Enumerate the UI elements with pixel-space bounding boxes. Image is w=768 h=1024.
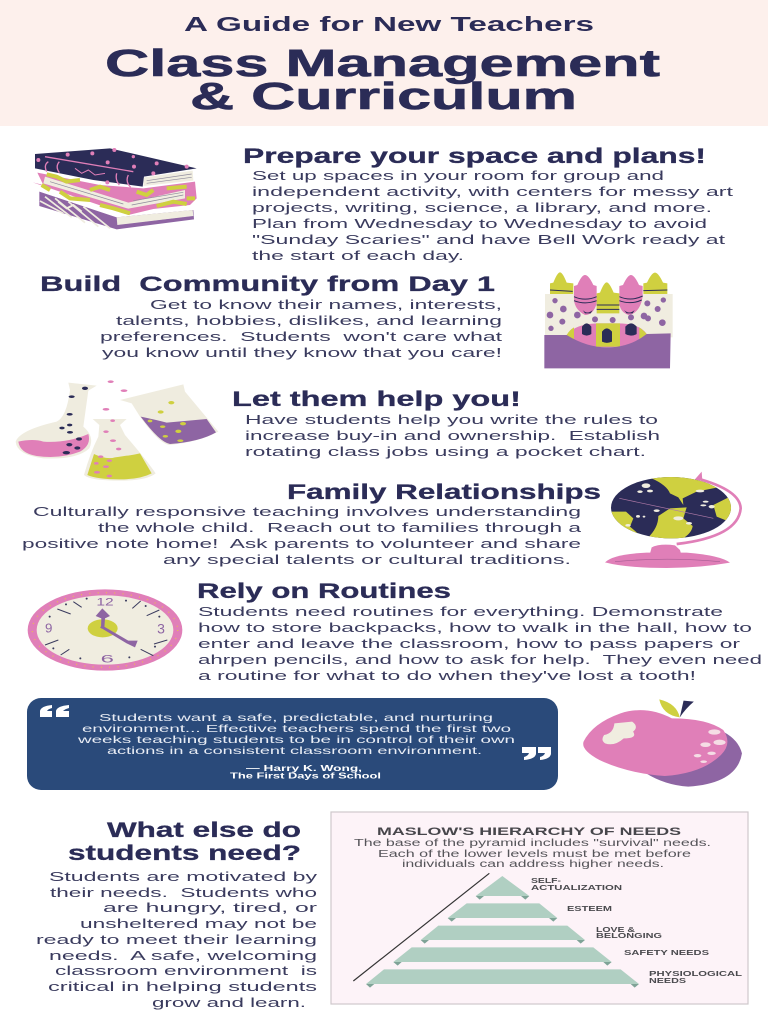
heading: What else do bbox=[107, 819, 301, 842]
body text: any special talents or cultural traditions. bbox=[163, 552, 571, 567]
section: rely on routines bbox=[197, 580, 762, 683]
body text: increase buy-in and ownership. Establish bbox=[245, 428, 660, 443]
body text: the start of each day. bbox=[252, 248, 464, 263]
body text: Culturally responsive teaching involves understanding bbox=[33, 504, 581, 519]
body text: a routine for what to do when they've lost a tooth! bbox=[198, 668, 696, 683]
section: prepare your space bbox=[243, 145, 734, 263]
body text: rotating class jobs using a pocket chart. bbox=[245, 444, 646, 459]
body text bbox=[22, 504, 582, 567]
heading: Prepare your space and plans! bbox=[243, 145, 706, 168]
pyramid labels: ACTUALIZATION bbox=[531, 885, 622, 892]
body text: ahrpen pencils, and how to ask for help. They even need bbox=[198, 652, 762, 667]
clock numerals: 12 bbox=[96, 597, 114, 609]
body text: Set up spaces in your room for group and bbox=[252, 168, 664, 183]
body text bbox=[245, 412, 660, 459]
body text: critical in helping students bbox=[48, 979, 318, 994]
pyramid labels: SAFETY NEEDS bbox=[624, 950, 710, 957]
body text: you know until they know that you care! bbox=[102, 345, 502, 360]
middle flask bbox=[84, 380, 156, 481]
pyramid chart bbox=[353, 873, 639, 988]
quote text bbox=[76, 712, 515, 757]
attribution bbox=[230, 763, 381, 780]
pyramid labels: BELONGING bbox=[596, 933, 663, 940]
body text: preferences. Students won't care what bbox=[100, 329, 503, 344]
heading: Let them help you! bbox=[232, 388, 521, 411]
body text: independent activity, with centers for messy art bbox=[252, 184, 734, 199]
body text: the whole child. Reach out to families through a bbox=[98, 520, 582, 535]
icon: globe bbox=[605, 472, 741, 568]
body text: Students need routines for everything. Demonstrate bbox=[198, 604, 723, 619]
body text: unsheltered may not be bbox=[80, 916, 317, 931]
heading: Rely on Routines bbox=[197, 580, 451, 603]
body text: talents, hobbies, dislikes, and learning bbox=[116, 313, 502, 328]
pyramid tiers bbox=[366, 876, 639, 984]
body text: classroom environment is bbox=[55, 963, 318, 978]
icon: crayon box bbox=[544, 272, 673, 368]
body text: Plan from Wednesday to Wednesday to avoid bbox=[252, 216, 707, 231]
pyramid labels bbox=[531, 878, 743, 985]
body text bbox=[252, 168, 734, 263]
panel: Maslow's hierarchy of needs bbox=[331, 812, 748, 1004]
body text: ready to meet their learning bbox=[36, 932, 317, 947]
subtitle: A Guide for New Teachers bbox=[184, 14, 594, 36]
panel heading: MASLOW'S HIERARCHY OF NEEDS bbox=[377, 826, 681, 838]
icon: apple with bite bbox=[583, 699, 742, 787]
section: let them help you bbox=[232, 388, 660, 459]
quote text: environment... Effective teachers spend the first two bbox=[82, 723, 511, 735]
body text: Get to know their names, interests, bbox=[150, 297, 502, 312]
panel description: Each of the lower levels must be met before bbox=[378, 849, 692, 860]
closing quote mark bbox=[522, 747, 551, 760]
body text: "Sunday Scaries" and have Bell Work ready at bbox=[252, 232, 726, 247]
body text: are hungry, tired, or bbox=[103, 900, 318, 915]
heading: Build Community from Day 1 bbox=[40, 273, 495, 296]
body text bbox=[198, 604, 762, 683]
pyramid labels: NEEDS bbox=[649, 978, 686, 985]
header band bbox=[0, 0, 768, 126]
clock numerals bbox=[45, 597, 165, 666]
title: Class Management bbox=[105, 43, 661, 85]
panel description: individuals can address higher needs. bbox=[402, 859, 664, 870]
pyramid labels: LOVE & bbox=[596, 927, 635, 934]
quote text: Students want a safe, predictable, and nurturing bbox=[99, 712, 493, 724]
body text: how to store backpacks, how to walk in the hall, how to bbox=[198, 620, 752, 635]
pyramid labels: ESTEEM bbox=[567, 906, 612, 913]
body text: enter and leave the classroom, how to pass papers or bbox=[198, 636, 741, 651]
pyramid labels: PHYSIOLOGICAL bbox=[649, 971, 743, 978]
panel description: The base of the pyramid includes "survival" needs. bbox=[354, 838, 711, 849]
heading bbox=[68, 819, 301, 865]
quote box bbox=[27, 698, 558, 790]
clock numerals: 6 bbox=[101, 654, 114, 666]
section: family relationships bbox=[22, 481, 601, 567]
body text: Have students help you write the rules to bbox=[245, 412, 658, 427]
clock numerals: 9 bbox=[45, 621, 52, 636]
body text bbox=[36, 869, 318, 1010]
section: build community bbox=[40, 273, 503, 360]
body text bbox=[100, 297, 503, 360]
heading: Family Relationships bbox=[287, 481, 601, 504]
attribution: The First Days of School bbox=[230, 770, 381, 780]
quote text: actions in a consistent classroom environment. bbox=[107, 745, 482, 757]
body text: projects, writing, science, a library, and more. bbox=[252, 200, 712, 215]
opening quote mark bbox=[40, 705, 69, 717]
section: what else do students need bbox=[36, 819, 318, 1010]
icon: stack of books bbox=[33, 148, 197, 229]
body text: Students are motivated by bbox=[49, 869, 318, 884]
icon: science flasks bbox=[16, 380, 218, 481]
attribution: — Harry K. Wong, bbox=[246, 763, 362, 773]
pyramid labels: SELF- bbox=[531, 878, 562, 885]
pyramid fold shadows bbox=[366, 896, 639, 988]
clock numerals: 3 bbox=[157, 620, 165, 636]
body text: grow and learn. bbox=[152, 995, 306, 1010]
icon: wall clock bbox=[28, 589, 182, 671]
heading: students need? bbox=[68, 842, 301, 865]
right flask bbox=[120, 384, 218, 445]
quote text: weeks teaching students to be in control of their own bbox=[76, 734, 515, 746]
title bbox=[105, 43, 661, 118]
body text: needs. A safe, welcoming bbox=[49, 948, 317, 963]
left flask bbox=[16, 383, 97, 459]
pyramid arrow bbox=[353, 873, 489, 981]
title: & Curriculum bbox=[190, 76, 577, 118]
body text: their needs. Students who bbox=[50, 885, 317, 900]
body text: positive note home! Ask parents to volunteer and share bbox=[22, 536, 581, 551]
panel description bbox=[354, 838, 711, 870]
